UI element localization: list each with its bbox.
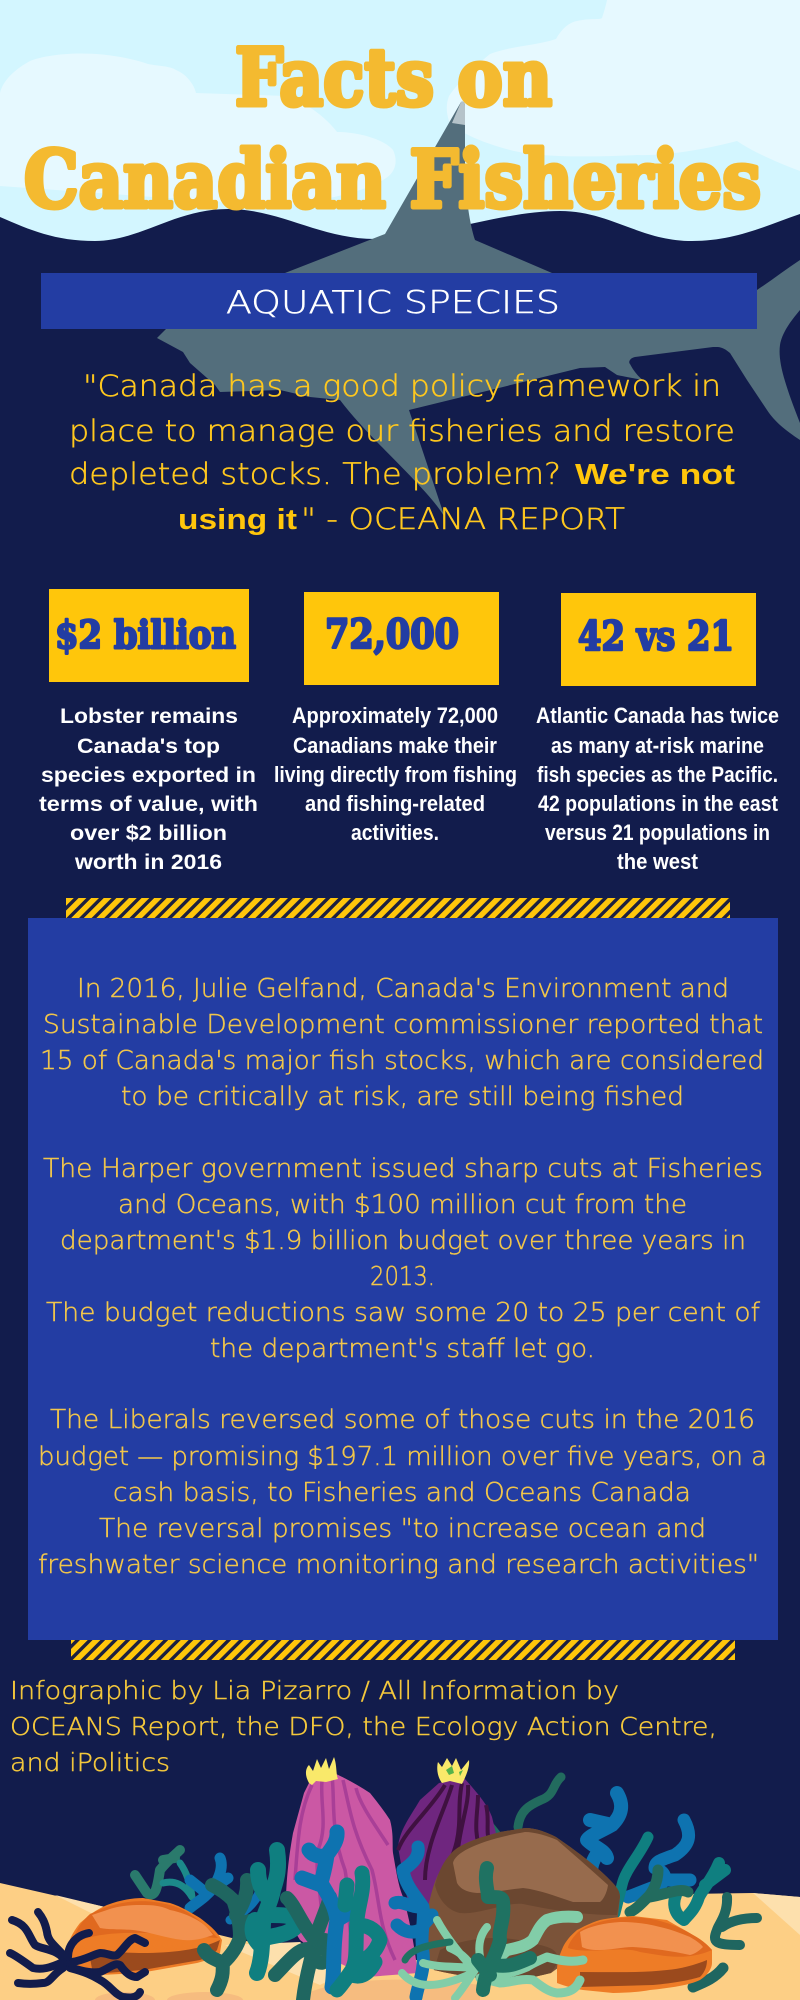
banner: aquatic species: AQUATIC SPECIES [226, 285, 560, 321]
text: employment fact: and fishing-related [305, 791, 485, 816]
text: Harper cuts: The Harper government issued sharp cuts at Fisheries [43, 1154, 763, 1184]
text: Harper cuts [43, 1154, 763, 1364]
text: Gelfand report: In 2016, Julie Gelfand, Canada's Environment and [77, 974, 729, 1004]
text: Liberal reversal: cash basis, to Fisheries and Oceans Canada [113, 1478, 691, 1508]
hazard stripe divider top [66, 898, 730, 918]
credits: and iPolitics [10, 1748, 170, 1777]
quote: Oceana report [69, 369, 735, 536]
weeds behind: left [135, 1850, 262, 1920]
text: Gelfand report: to be critically at risk, are still being fished [121, 1082, 684, 1112]
coral: purple [398, 1778, 500, 1950]
text: Liberal reversal: freshwater science monitoring and research activities" [38, 1550, 759, 1580]
text: lobster fact [39, 705, 258, 874]
credits: Infographic by Lia Pizarro / All Information by [10, 1676, 619, 1705]
text: Gelfand report: Sustainable Development commissioner reported that [43, 1010, 763, 1040]
text: Harper cuts: and Oceans, with $100 million cut from the [118, 1190, 687, 1220]
text: Liberal reversal: The Liberals reversed some of those cuts in the 2016 [50, 1405, 755, 1435]
quote: Oceana report: " - OCEANA REPORT [301, 502, 625, 536]
text: employment fact: Canadians make their [293, 733, 497, 758]
text: Gelfand report [40, 974, 764, 1112]
shark silhouette [157, 102, 800, 518]
text: Harper cuts: The budget reductions saw some 20 to 25 per cent of [46, 1298, 761, 1328]
credits: OCEANS Report, the DFO, the Ecology Action Centre, [10, 1712, 717, 1741]
text: Harper cuts: 2013. [370, 1262, 435, 1292]
sky with clouds [0, 0, 800, 250]
stat card: 72,000 [304, 592, 499, 685]
text: employment fact: activities. [351, 820, 439, 845]
text: Gelfand report: 15 of Canada's major fish stocks, which are considered [40, 1046, 764, 1076]
shell: right orange [557, 1916, 712, 1993]
text: lobster fact: Canada's top [77, 735, 220, 758]
stat card: 42 vs 21 [561, 593, 756, 686]
credits [10, 1676, 717, 1777]
quote: Oceana report: "Canada has a good policy framework in [83, 369, 721, 403]
quote: Oceana report: place to manage our fisheries and restore [69, 414, 735, 448]
weeds front [204, 1832, 583, 2000]
text: lobster fact: Lobster remains [60, 705, 238, 728]
text: at-risk species fact: as many at-risk marine [551, 733, 764, 758]
banner: aquatic species [41, 273, 757, 329]
quote: Oceana report: We're not [575, 459, 735, 491]
coral crowns [306, 1757, 469, 1785]
coral: pink [286, 1773, 418, 1977]
stat card: 42 vs 21: 42 vs 21 [578, 613, 734, 660]
text: lobster fact: species exported in [41, 764, 256, 787]
panel: policy history [28, 918, 778, 1640]
hazard stripe divider bottom [71, 1640, 735, 1660]
text: employment fact: living directly from fishing [274, 762, 517, 787]
text: lobster fact: terms of value, with [39, 793, 258, 816]
text: at-risk species fact: versus 21 populations in [545, 820, 770, 845]
anemone: navy tendrils [10, 1912, 145, 1997]
text: employment fact [274, 703, 517, 845]
weeds behind: upper right [485, 1777, 757, 1987]
text: Liberal reversal: The reversal promises "to increase ocean and [99, 1514, 706, 1544]
shell: left orange [67, 1898, 222, 1975]
text: Harper cuts: the department's staff let go. [210, 1334, 595, 1364]
seabed scene [0, 1757, 800, 2000]
text: employment fact: Approximately 72,000 [292, 703, 498, 728]
rock: large brown [423, 1828, 620, 1980]
text: Liberal reversal [38, 1405, 767, 1580]
quote: Oceana report: depleted stocks. The problem? [69, 457, 561, 491]
text: at-risk species fact: Atlantic Canada has twice [536, 703, 779, 728]
text: Harper cuts: department's $1.9 billion budget over three years in [60, 1226, 746, 1256]
title [24, 31, 761, 226]
wave: ocean surface [0, 209, 800, 300]
text: Liberal reversal: budget — promising $197.1 million over five years, on a [38, 1442, 767, 1472]
text: at-risk species fact [536, 703, 779, 874]
stat card: $2 billion [49, 589, 249, 682]
text: lobster fact: worth in 2016 [74, 851, 222, 874]
stat card: $2 billion: $2 billion [55, 612, 236, 657]
text: at-risk species fact: the west [617, 849, 699, 874]
stat card: 72,000: 72,000 [325, 611, 459, 658]
text: lobster fact: over $2 billion [70, 822, 227, 845]
sand [0, 1883, 800, 2000]
quote: Oceana report: using it [178, 504, 297, 536]
title: Facts on [235, 31, 552, 124]
